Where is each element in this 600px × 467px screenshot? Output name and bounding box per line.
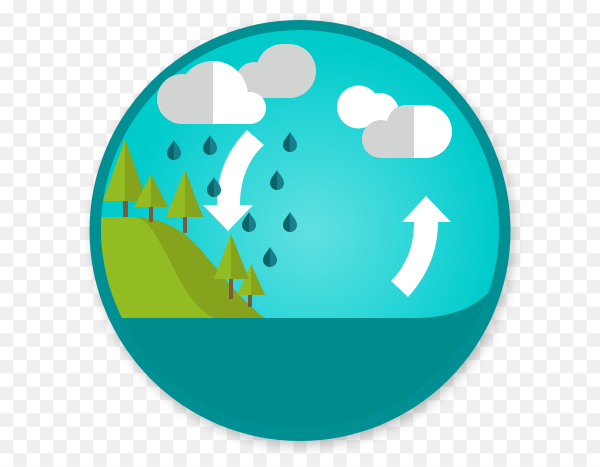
evaporation cloud [362, 105, 452, 158]
cloud shaded half [157, 61, 213, 124]
hill light [95, 217, 214, 318]
tree 2 [134, 174, 168, 222]
hill dark [95, 217, 265, 318]
tree 4 [214, 234, 249, 299]
arrow: evaporation up [391, 196, 451, 297]
arrow: falling rain down [203, 130, 264, 231]
back cloud upper [236, 44, 316, 98]
tree 1 [103, 139, 147, 217]
tree 5 [237, 264, 265, 307]
tree 3 [166, 170, 203, 233]
white cloud right back [337, 86, 399, 131]
rain cloud [157, 61, 266, 124]
sea [90, 280, 510, 445]
cloud white half [213, 61, 266, 124]
badge shadow [93, 25, 513, 445]
sky panel [90, 20, 510, 318]
rain drops [167, 132, 297, 267]
badge outer ring [90, 20, 510, 441]
